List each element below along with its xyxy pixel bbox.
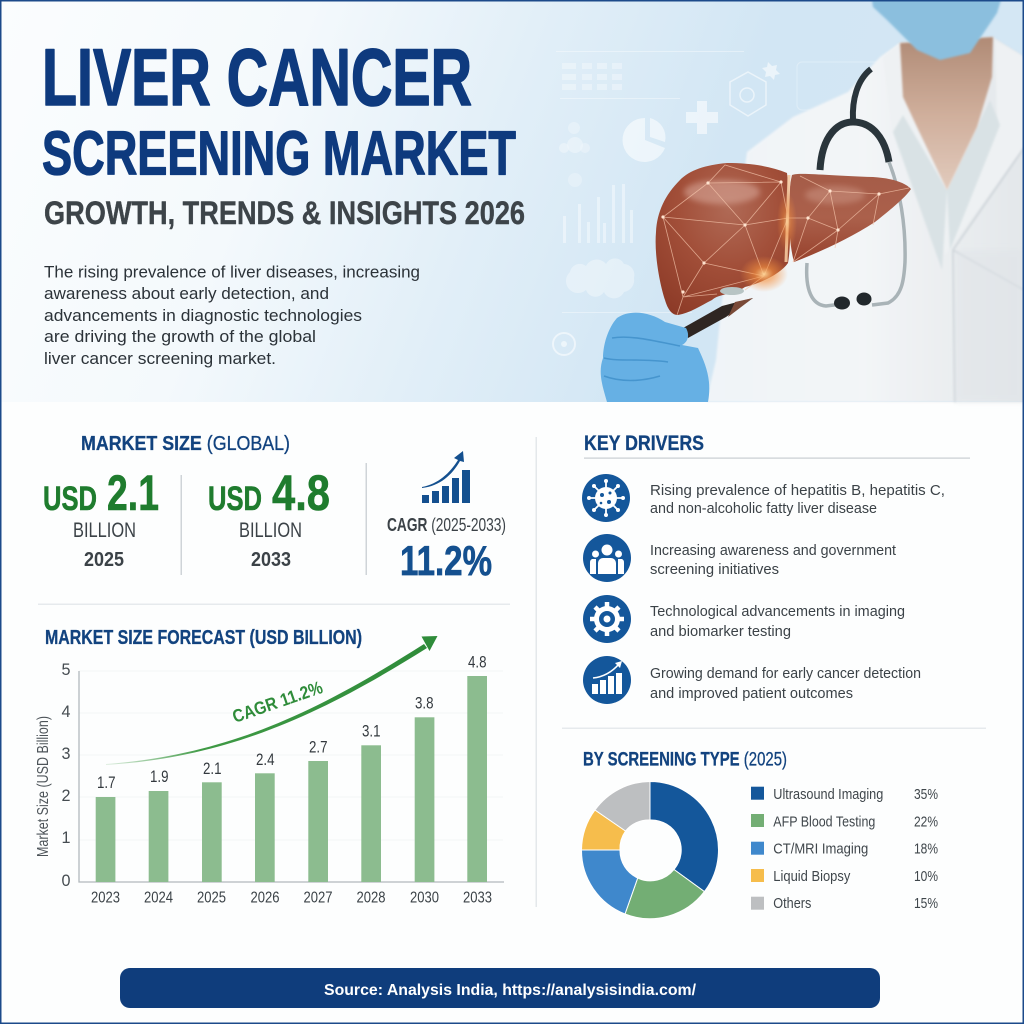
screening type heading: BY SCREENING TYPE (2025) bbox=[583, 748, 787, 770]
value labels: 4.8 bbox=[468, 652, 486, 672]
stat: CAGR bbox=[387, 515, 506, 584]
stat: 2025 market size bbox=[43, 465, 159, 571]
driver 3 bbox=[583, 595, 905, 643]
forecast heading: MARKET SIZE FORECAST (USD BILLION) bbox=[45, 627, 362, 649]
panel: market size bbox=[43, 433, 506, 584]
driver 3 text bbox=[650, 603, 905, 640]
donut chart bbox=[581, 782, 718, 919]
driver 1 bbox=[582, 474, 945, 522]
stat: 2033 market size: 4.8 bbox=[272, 465, 330, 521]
y-axis ticks: 1 bbox=[62, 828, 70, 847]
legend: CT/MRI bbox=[751, 841, 938, 858]
driver 2 text: screening initiatives bbox=[650, 561, 779, 578]
y-axis ticks: 2 bbox=[62, 786, 70, 805]
panel: market size forecast bbox=[35, 627, 504, 906]
legend: others: Others bbox=[773, 895, 811, 912]
year labels: 2028 bbox=[356, 890, 386, 906]
icon: growth bars with arrow bbox=[422, 451, 470, 503]
icon: growth chart bbox=[583, 656, 631, 704]
stat: 2025 market size: USD bbox=[43, 480, 97, 518]
legend: ultrasound: Ultrasound Imaging bbox=[773, 786, 883, 803]
year labels: 2023 bbox=[91, 890, 120, 906]
value labels: 3.1 bbox=[362, 722, 380, 740]
gloved hand bbox=[601, 313, 709, 402]
hologram icons bbox=[553, 51, 897, 355]
legend: liquid biopsy: Liquid Biopsy bbox=[773, 868, 851, 885]
stat: 2025 market size: BILLION bbox=[73, 519, 136, 542]
legend: liquid biopsy: 10% bbox=[914, 868, 938, 885]
intro paragraph bbox=[44, 264, 420, 368]
hero banner bbox=[0, 0, 1024, 402]
bars bbox=[96, 676, 487, 882]
value labels bbox=[97, 652, 486, 792]
key drivers heading: KEY DRIVERS bbox=[584, 432, 704, 455]
panel: by screening type bbox=[581, 748, 938, 919]
legend: others bbox=[751, 895, 938, 912]
intro paragraph: liver cancer screening market. bbox=[44, 350, 276, 368]
y-axis ticks: 5 bbox=[62, 660, 70, 679]
CAGR label on arrow: CAGR 11.2% bbox=[230, 677, 325, 727]
y-axis ticks: 3 bbox=[62, 744, 70, 763]
icon: virus bbox=[582, 474, 630, 522]
bar chart bbox=[35, 636, 504, 906]
legend: liquid biopsy bbox=[751, 868, 938, 885]
stat: CAGR: CAGR (2025-2033) bbox=[387, 515, 506, 535]
intro paragraph: The rising prevalence of liver diseases, increasing bbox=[44, 264, 420, 282]
market size heading: MARKET SIZE (GLOBAL) bbox=[81, 433, 290, 455]
stethoscope bbox=[807, 69, 905, 306]
stat: 2033 market size: 2033 bbox=[251, 549, 291, 571]
source footer bbox=[120, 968, 880, 1008]
year labels: 2030 bbox=[410, 890, 439, 906]
intro paragraph: advancements in diagnostic technologies bbox=[44, 307, 362, 325]
y-axis label: Market Size (USD Billion) bbox=[35, 716, 52, 857]
year labels: 2027 bbox=[304, 890, 333, 906]
driver 2 bbox=[583, 534, 897, 582]
legend: AFP: AFP Blood Testing bbox=[773, 813, 875, 830]
title bbox=[42, 33, 525, 231]
stat: 2033 market size: BILLION bbox=[239, 519, 302, 542]
value labels: 3.8 bbox=[415, 694, 434, 712]
year labels: 2025 bbox=[197, 890, 226, 906]
value labels: 1.7 bbox=[97, 773, 116, 792]
source footer: Source: Analysis India, https://analysisindia.com/ bbox=[324, 982, 697, 999]
icon: people bbox=[583, 534, 631, 582]
liver bbox=[656, 163, 911, 315]
driver 1 text: and non-alcoholic fatty liver disease bbox=[650, 500, 877, 517]
year labels: 2026 bbox=[250, 890, 280, 906]
title: LIVER CANCER bbox=[42, 33, 472, 123]
y-axis ticks: 0 bbox=[62, 871, 70, 890]
panel: key drivers bbox=[582, 432, 970, 704]
legend: CT/MRI: 18% bbox=[914, 841, 938, 858]
driver 4 text: and improved patient outcomes bbox=[650, 685, 853, 702]
value labels: 2.4 bbox=[256, 750, 274, 769]
y-axis ticks bbox=[62, 660, 70, 890]
driver 2 text: Increasing awareness and government bbox=[650, 542, 897, 559]
coat lapels bbox=[883, 40, 1024, 255]
legend: ultrasound bbox=[751, 786, 938, 803]
year labels: 2024 bbox=[144, 890, 173, 906]
stat: 2033 market size bbox=[208, 465, 330, 571]
y-axis ticks: 4 bbox=[62, 702, 70, 721]
pen bbox=[683, 298, 753, 338]
stat: CAGR: 11.2% bbox=[400, 537, 492, 584]
year labels: 2033 bbox=[463, 890, 492, 906]
intro paragraph: awareness about early detection, and bbox=[44, 285, 329, 303]
illustration: doctor holding liver bbox=[601, 0, 1024, 402]
stat: 2025 market size: 2.1 bbox=[107, 465, 159, 521]
legend: AFP: 22% bbox=[914, 813, 938, 830]
legend: ultrasound: 35% bbox=[914, 786, 938, 803]
driver 3 text: Technological advancements in imaging bbox=[650, 603, 905, 620]
value labels: 2.7 bbox=[309, 738, 328, 756]
icon: gear bbox=[583, 595, 631, 643]
legend bbox=[751, 786, 938, 912]
legend: others: 15% bbox=[914, 895, 938, 912]
legend: CT/MRI: CT/MRI Imaging bbox=[773, 841, 868, 858]
year labels bbox=[91, 890, 492, 906]
driver 3 text: and biomarker testing bbox=[650, 623, 791, 640]
driver 4 bbox=[583, 656, 921, 704]
value labels: 1.9 bbox=[150, 767, 168, 786]
stat: 2033 market size: USD bbox=[208, 480, 262, 518]
driver 4 text bbox=[650, 665, 921, 702]
neck skin bbox=[900, 37, 993, 190]
shirt and collar bbox=[893, 100, 1000, 270]
value labels: 2.1 bbox=[203, 759, 222, 778]
driver 4 text: Growing demand for early cancer detection bbox=[650, 665, 921, 682]
title: SCREENING MARKET bbox=[42, 120, 516, 188]
doctor coat bbox=[706, 37, 1024, 402]
stat: 2025 market size: 2025 bbox=[84, 549, 124, 571]
driver 2 text bbox=[650, 542, 897, 578]
driver 1 text bbox=[650, 482, 945, 517]
legend: AFP bbox=[751, 813, 938, 830]
liver mesh bbox=[663, 165, 909, 315]
driver 1 text: Rising prevalence of hepatitis B, hepatitis C, bbox=[650, 482, 945, 499]
intro paragraph: are driving the growth of the global bbox=[44, 328, 316, 346]
surgical mask bbox=[872, 0, 1001, 60]
arrow: growth trend bbox=[106, 636, 438, 765]
title: GROWTH, TRENDS & INSIGHTS 2026 bbox=[44, 195, 525, 231]
